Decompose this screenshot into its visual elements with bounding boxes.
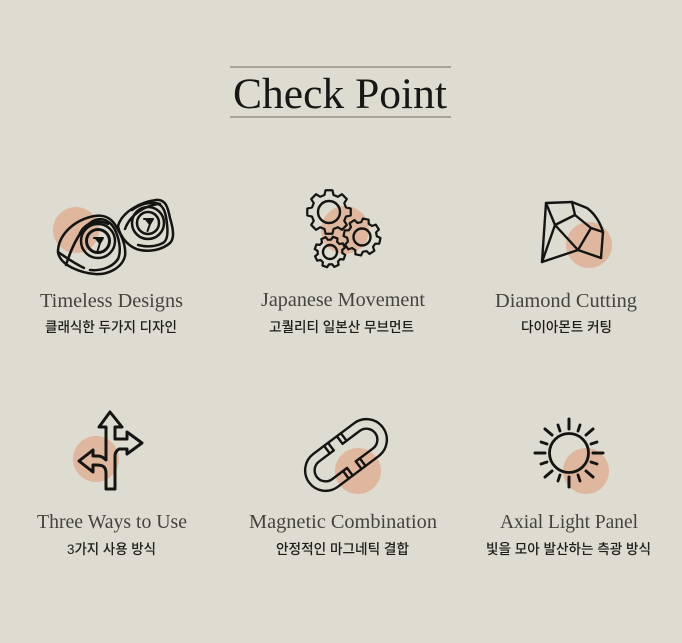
heading: Diamond Cutting: Diamond Cutting	[495, 290, 637, 312]
panel: Three Ways to Use	[37, 412, 187, 557]
panel: Axial Light Panel	[486, 419, 651, 557]
panel: Japanese Movement	[261, 190, 425, 335]
heading: Japanese Movement: Japanese Movement	[261, 289, 425, 311]
panel: Diamond Cutting	[495, 202, 637, 335]
heading: Timeless Designs: Timeless Designs	[40, 290, 183, 312]
text: Korean caption: 클래식한 두가지 디자인	[45, 319, 177, 335]
text: Korean caption: 고퀄리티 일본산 무브먼트	[269, 319, 414, 335]
panel: Magnetic Combination	[249, 411, 437, 557]
icon: three-way arrows	[73, 412, 142, 489]
panel: Timeless Designs	[40, 200, 183, 335]
icon: gears	[307, 190, 384, 272]
heading: Three Ways to Use: Three Ways to Use	[37, 511, 187, 533]
text: Korean caption: 3가지 사용 방식	[67, 541, 156, 557]
title: Check Point: Check Point	[233, 71, 447, 118]
text: Korean caption: 빛을 모아 발산하는 측광 방식	[486, 541, 651, 557]
heading: Axial Light Panel: Axial Light Panel	[500, 511, 638, 533]
icon: earrings	[53, 200, 173, 274]
icon: diamond	[542, 202, 612, 268]
heading: Magnetic Combination: Magnetic Combination	[249, 511, 437, 533]
text: Korean caption: 다이아몬트 커팅	[521, 319, 612, 335]
icon: sun	[535, 419, 609, 494]
text: Korean caption: 안정적인 마그네틱 결합	[276, 541, 409, 557]
icon: magnetic chain link	[297, 411, 395, 499]
